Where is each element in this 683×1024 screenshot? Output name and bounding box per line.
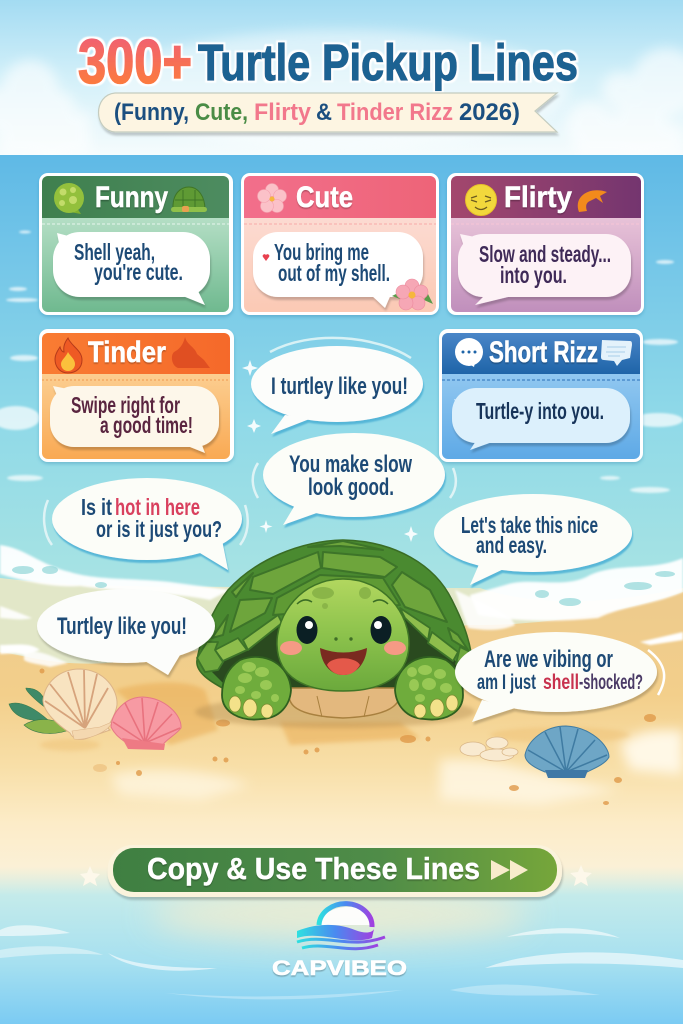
tinder line [71,392,193,438]
sparkles [242,360,418,542]
cute line: out of my shell. [278,260,390,286]
blue shell [525,726,609,778]
button [108,845,562,897]
pink shell [111,697,181,750]
panel: cute [241,173,439,315]
bubble: turtley like you [37,589,215,675]
shell opening [208,610,460,692]
icon: small turtle [171,187,207,212]
subtitle text [114,99,520,126]
subtitle text: (Funny, [114,99,189,126]
subtitle text: Cute, [195,99,248,126]
line text [461,512,598,558]
line text: You make slow [289,451,412,478]
speech bubble: cute [253,232,423,308]
flirty line: Slow and steady... [479,241,611,267]
cute line: You bring me [274,239,369,265]
tinder heading: Tinder [88,336,166,369]
panel: funny [39,173,233,315]
turtle head [277,579,409,691]
line text [81,494,222,542]
icon: dark flame [172,337,210,368]
panel: short rizz [439,329,643,462]
big cream shell [43,669,117,739]
turtle right leg [395,657,463,720]
icon: message card [601,340,632,366]
subtitle text: Flirty [254,99,312,126]
funny line [74,239,183,285]
logo wordmark: CAPVIBEO [272,957,407,980]
icon: chat bubble [455,338,483,367]
speech bubble: funny [53,232,210,305]
sand beach [0,592,683,895]
shell flaps [197,608,470,672]
bubble: you make slow [253,433,456,525]
star left [80,866,100,886]
line text: Turtley like you! [57,613,187,640]
line text: and easy. [476,532,547,558]
icon: flame [55,338,82,373]
subtitle text: & [316,99,332,126]
turtle [197,540,471,720]
lower wave streaks [0,925,683,999]
sunlit glow behind logo [150,889,530,941]
line text: or is it just you? [96,516,222,542]
icon: winking face [466,184,496,216]
line text: look good. [308,474,394,501]
subtitle text: 2026) [459,99,520,126]
icon: orange swoosh [578,190,607,212]
title words: Turtle Pickup Lines [198,34,578,91]
sky background [0,0,683,164]
cute heading: Cute [296,181,353,214]
logo [272,904,407,980]
bubble: are we vibing [455,632,664,722]
line text: Let's take this nice [461,512,598,538]
line text [289,451,412,501]
line text: Is it [81,494,112,520]
subtitle ribbon [98,93,557,132]
flirty line: into you. [500,262,567,288]
funny line: you're cute. [94,259,183,285]
turtle belly [289,688,400,718]
logo mark [297,904,385,949]
foam spots [12,566,675,606]
clouds left [0,60,90,164]
leaves [9,688,72,734]
title number: 300+ [78,28,192,97]
eyes [296,616,392,644]
flirty heading: Flirty [504,181,572,214]
pebbles [460,737,518,761]
bubble: is it hot in here [44,478,248,570]
funny heading: Funny [95,181,168,214]
funny line: Shell yeah, [74,239,155,265]
tinder line: Swipe right for [71,392,180,418]
bubble: let's take this nice [434,494,632,585]
short rizz line: Turtle-y into you. [476,398,604,424]
line text: I turtley like you! [271,373,408,400]
clouds right [566,48,683,160]
line text: shell [543,671,579,694]
panel: flirty [447,173,644,315]
speech bubble: flirty [458,234,631,305]
line text: hot in here [115,494,200,520]
icon: fast-forward arrows [491,860,528,880]
short rizz heading: Short Rizz [489,336,598,369]
cute line [274,239,390,286]
star right [570,865,592,886]
sand speckles [40,668,656,805]
panel: tinder [39,329,234,462]
cheeks [280,641,406,655]
mouth [320,648,367,675]
button text: Copy & Use These Lines [147,851,480,886]
speech bubble: short rizz [452,388,630,450]
icon: heart [263,254,269,261]
subtitle text: Tinder Rizz [337,99,453,126]
wet sand band [0,578,683,700]
tinder line: a good time! [100,412,193,438]
icon: flower [258,184,286,212]
foam [0,545,683,667]
line text: am I just [477,671,536,694]
turtle shell [197,540,471,692]
turtle left leg [222,657,291,720]
icon: flower corner [392,279,433,310]
line text: -shocked? [579,671,643,694]
sand patches [40,682,630,751]
turtle ground shadow [195,696,475,728]
speech bubble: tinder [50,386,219,453]
icon: green bubble [54,183,84,214]
line text: Are we vibing or [484,646,613,673]
bubble: i turtley like you [251,338,423,434]
lower beach sweeps [110,730,683,805]
flirty line [479,241,611,288]
title [78,28,578,97]
line text [477,646,643,694]
